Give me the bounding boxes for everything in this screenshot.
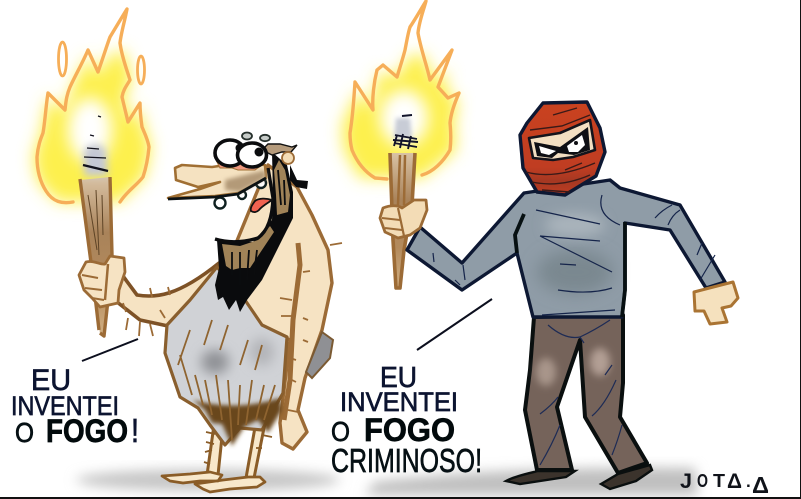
signature bbox=[680, 470, 769, 498]
arsonist torch hand bbox=[380, 200, 427, 238]
pouch bbox=[306, 332, 333, 378]
torch: arsonist bbox=[390, 115, 418, 288]
signature: Δ bbox=[752, 472, 769, 498]
caption: arsonist: CRIMINOSO! bbox=[331, 442, 482, 479]
caption: caveman: INVENTEI bbox=[11, 391, 119, 421]
tongue bbox=[251, 199, 272, 212]
arm hairs bbox=[123, 287, 170, 336]
flame drop right bbox=[138, 56, 144, 84]
right border bbox=[800, 0, 801, 499]
ground shadow: arsonist bbox=[365, 468, 698, 495]
signature: Δ bbox=[727, 470, 742, 493]
arsonist mask bbox=[520, 102, 605, 195]
eye opening bbox=[529, 120, 595, 160]
teeth bbox=[214, 198, 226, 208]
bottom border bbox=[0, 497, 801, 499]
goggles bbox=[534, 127, 590, 158]
ear bbox=[282, 152, 294, 164]
inner arm line bbox=[284, 243, 300, 420]
fur fringe bbox=[193, 398, 282, 446]
hair back flicks bbox=[290, 165, 308, 189]
head rings bbox=[242, 132, 252, 140]
caption: arsonist: FOGO bbox=[364, 412, 455, 448]
caption: arsonist bbox=[331, 362, 482, 479]
left eye bbox=[215, 140, 245, 166]
torch: caveman bbox=[80, 116, 112, 336]
caveman body bbox=[79, 165, 342, 492]
signature: T bbox=[713, 471, 725, 491]
right eye bbox=[238, 143, 266, 167]
front leg bbox=[246, 416, 266, 478]
caption: caveman: FOGO bbox=[46, 413, 128, 449]
left eye bbox=[539, 146, 556, 155]
flame drop left bbox=[58, 42, 66, 76]
beard brown streak bbox=[222, 160, 290, 270]
caption: caveman: ! bbox=[131, 412, 139, 449]
holding arm bbox=[117, 263, 225, 326]
caption: arsonist: INVENTEI bbox=[340, 387, 458, 417]
right eye bbox=[567, 135, 585, 152]
ground shadow: caveman bbox=[76, 469, 340, 491]
back leg bbox=[207, 425, 223, 475]
signature: . bbox=[746, 472, 751, 491]
caption: caveman: O bbox=[15, 417, 34, 448]
mouth line bbox=[215, 168, 273, 242]
right shoe bbox=[601, 465, 652, 489]
hand holding torch bbox=[79, 256, 125, 307]
caveman beard and hair bbox=[215, 152, 308, 312]
arsonist sweater bbox=[407, 180, 725, 317]
flame: caveman torch bbox=[33, 9, 151, 203]
leg hairs bbox=[204, 432, 272, 464]
arsonist trousers bbox=[506, 315, 652, 489]
body hairs bbox=[280, 243, 342, 412]
caption: arsonist: O bbox=[331, 416, 350, 447]
cheek blush bbox=[214, 152, 262, 170]
caption: caveman bbox=[11, 364, 139, 449]
signature: O bbox=[697, 471, 708, 491]
pointer line: caveman bbox=[82, 339, 138, 361]
arsonist fist bbox=[694, 282, 738, 324]
torso and hanging arm bbox=[225, 165, 332, 449]
forehead hair band bbox=[262, 144, 297, 155]
caveman head bbox=[168, 132, 297, 242]
feet bbox=[162, 472, 265, 492]
caption: caveman: EU bbox=[31, 364, 71, 397]
beard base bbox=[215, 152, 293, 312]
caption: arsonist: EU bbox=[380, 362, 417, 394]
pointer line: arsonist bbox=[417, 299, 492, 350]
signature: J bbox=[680, 470, 692, 493]
nose and upper lip bbox=[168, 163, 266, 198]
left shoe bbox=[506, 471, 575, 484]
flame: arsonist torch bbox=[342, 1, 459, 179]
fur tunic bbox=[165, 267, 287, 445]
